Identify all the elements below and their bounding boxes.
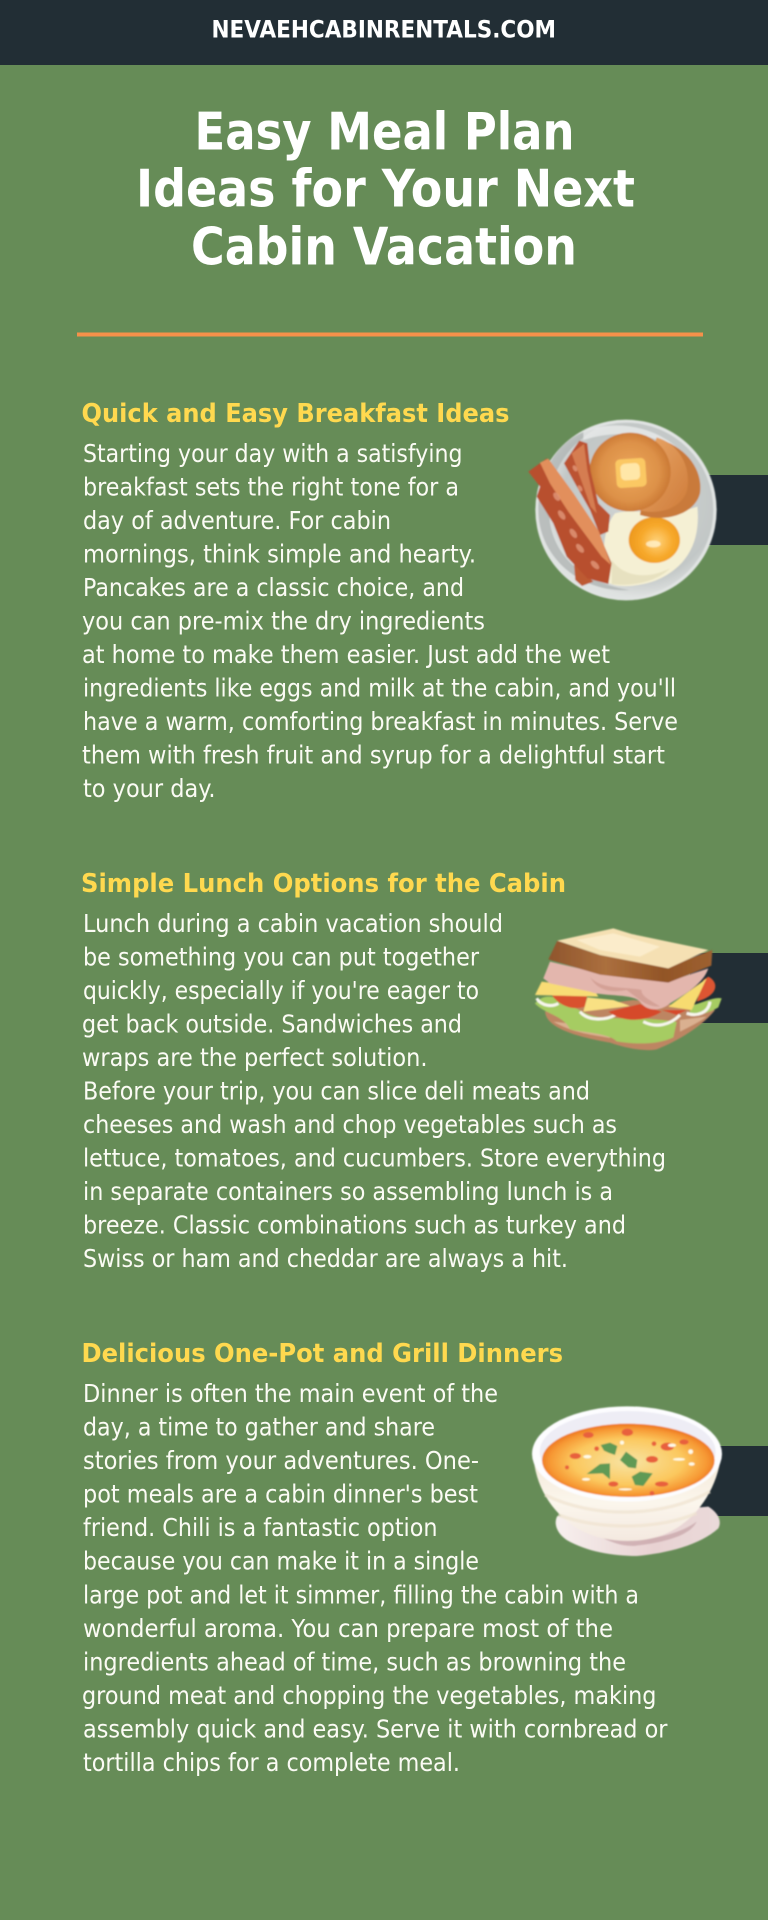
lettuce <box>535 997 677 1043</box>
body text: breakfast: Starting your day with a satisfying <box>83 439 462 468</box>
body text: dinner: Dinner is often the main event of the <box>83 1379 498 1408</box>
body text: lunch: breeze. Classic combinations such as turkey and <box>83 1210 626 1240</box>
header bar <box>0 0 768 65</box>
body text: dinner: assembly quick and easy. Serve it with cornbread or <box>83 1714 668 1744</box>
butter <box>615 458 647 488</box>
body text: breakfast: have a warm, comforting breakfast in minutes. Serve <box>83 707 678 736</box>
bacon front strips <box>528 458 612 584</box>
onion rings <box>537 998 710 1025</box>
body text: lunch: be something you can put together <box>83 942 480 972</box>
body text: lunch: Before your trip, you can slice deli meats and <box>83 1076 590 1106</box>
panel: lunch <box>81 868 768 1273</box>
bottom bread <box>545 1000 715 1050</box>
saucer <box>556 1507 720 1556</box>
body text: dinner <box>82 1379 668 1777</box>
heading: breakfast: Quick and Easy Breakfast Ideas <box>82 398 510 428</box>
body text: lunch: Swiss or ham and cheddar are always a hit. <box>83 1244 568 1273</box>
front pancake <box>589 433 671 511</box>
cheese <box>535 982 598 997</box>
body text: dinner: stories from your adventures. One- <box>83 1446 479 1475</box>
panel: breakfast <box>82 398 768 803</box>
body text: lunch <box>82 909 666 1273</box>
heading: lunch: Simple Lunch Options for the Cabin <box>81 868 566 898</box>
body text: breakfast: at home to make them easier. Just add the wet <box>82 640 610 669</box>
dark tab: breakfast <box>700 475 768 545</box>
dark tab: lunch <box>690 953 768 1023</box>
panel: dinner <box>82 1338 768 1777</box>
tomato <box>552 995 587 1008</box>
egg white <box>604 507 698 586</box>
yolk <box>629 517 680 563</box>
body text: dinner: large pot and let it simmer, filling the cabin with a <box>83 1580 639 1610</box>
illustration: pancakes, bacon and egg plate <box>528 420 717 600</box>
body text: lunch: lettuce, tomatoes, and cucumbers. Store everything <box>83 1144 666 1172</box>
body text: breakfast: Pancakes are a classic choice, and <box>83 573 464 602</box>
bacon tail <box>574 563 593 586</box>
body text: breakfast <box>82 439 678 803</box>
body text: dinner: ingredients ahead of time, such as browning the <box>83 1648 626 1676</box>
back pancakes <box>640 438 700 518</box>
body text: dinner: tortilla chips for a complete meal. <box>83 1748 460 1777</box>
body text: dinner: because you can make it in a single <box>83 1546 479 1576</box>
body text: lunch: wraps are the perfect solution. <box>82 1043 428 1072</box>
white specks <box>582 1441 695 1490</box>
parsley <box>587 1443 653 1486</box>
body text: lunch: quickly, especially if you're eager to <box>83 976 479 1005</box>
body text: breakfast: you can pre-mix the dry ingredients <box>82 606 485 636</box>
body text: dinner: wonderful aroma. You can prepare most of the <box>83 1614 613 1643</box>
vegetable pieces <box>565 1429 689 1496</box>
title: Cabin Vacation <box>191 218 577 278</box>
website address: NEVAEHCABINRENTALS.COM <box>212 15 556 44</box>
title: Easy Meal Plan <box>194 102 574 162</box>
body text: lunch: get back outside. Sandwiches and <box>82 1010 462 1038</box>
body text: breakfast: to your day. <box>83 774 216 803</box>
body text: breakfast: day of adventure. For cabin <box>83 506 391 535</box>
bacon back strip <box>564 441 610 535</box>
top bread crust <box>548 941 712 983</box>
ham <box>543 962 708 1009</box>
dark tab: dinner <box>690 1446 768 1516</box>
body text: dinner: ground meat and chopping the vegetables, making <box>82 1681 656 1710</box>
bowl rim <box>532 1406 722 1502</box>
body text: lunch: cheeses and wash and chop vegetables such as <box>83 1110 617 1139</box>
body text: breakfast: mornings, think simple and hearty. <box>83 540 476 568</box>
body text: dinner: friend. Chili is a fantastic option <box>83 1513 438 1542</box>
illustration: sandwich <box>535 928 722 1050</box>
body text: dinner: day, a time to gather and share <box>83 1412 435 1442</box>
illustration: soup bowl <box>532 1406 722 1556</box>
title <box>136 102 635 278</box>
soup <box>542 1424 715 1497</box>
title: Ideas for Your Next <box>136 160 635 220</box>
body text: lunch: in separate containers so assembling lunch is a <box>83 1177 613 1206</box>
body text: breakfast: them with fresh fruit and syrup for a delightful start <box>82 740 665 770</box>
body text: dinner: pot meals are a cabin dinner's best <box>83 1480 478 1508</box>
body text: lunch: Lunch during a cabin vacation should <box>83 909 503 938</box>
body text: breakfast: breakfast sets the right tone for a <box>83 472 459 502</box>
top bread face <box>557 928 708 968</box>
body text: breakfast: ingredients like eggs and milk at the cabin, and you'll <box>83 674 676 702</box>
orange divider <box>77 332 703 336</box>
bowl body <box>533 1455 721 1541</box>
heading: dinner: Delicious One-Pot and Grill Dinners <box>82 1338 563 1368</box>
